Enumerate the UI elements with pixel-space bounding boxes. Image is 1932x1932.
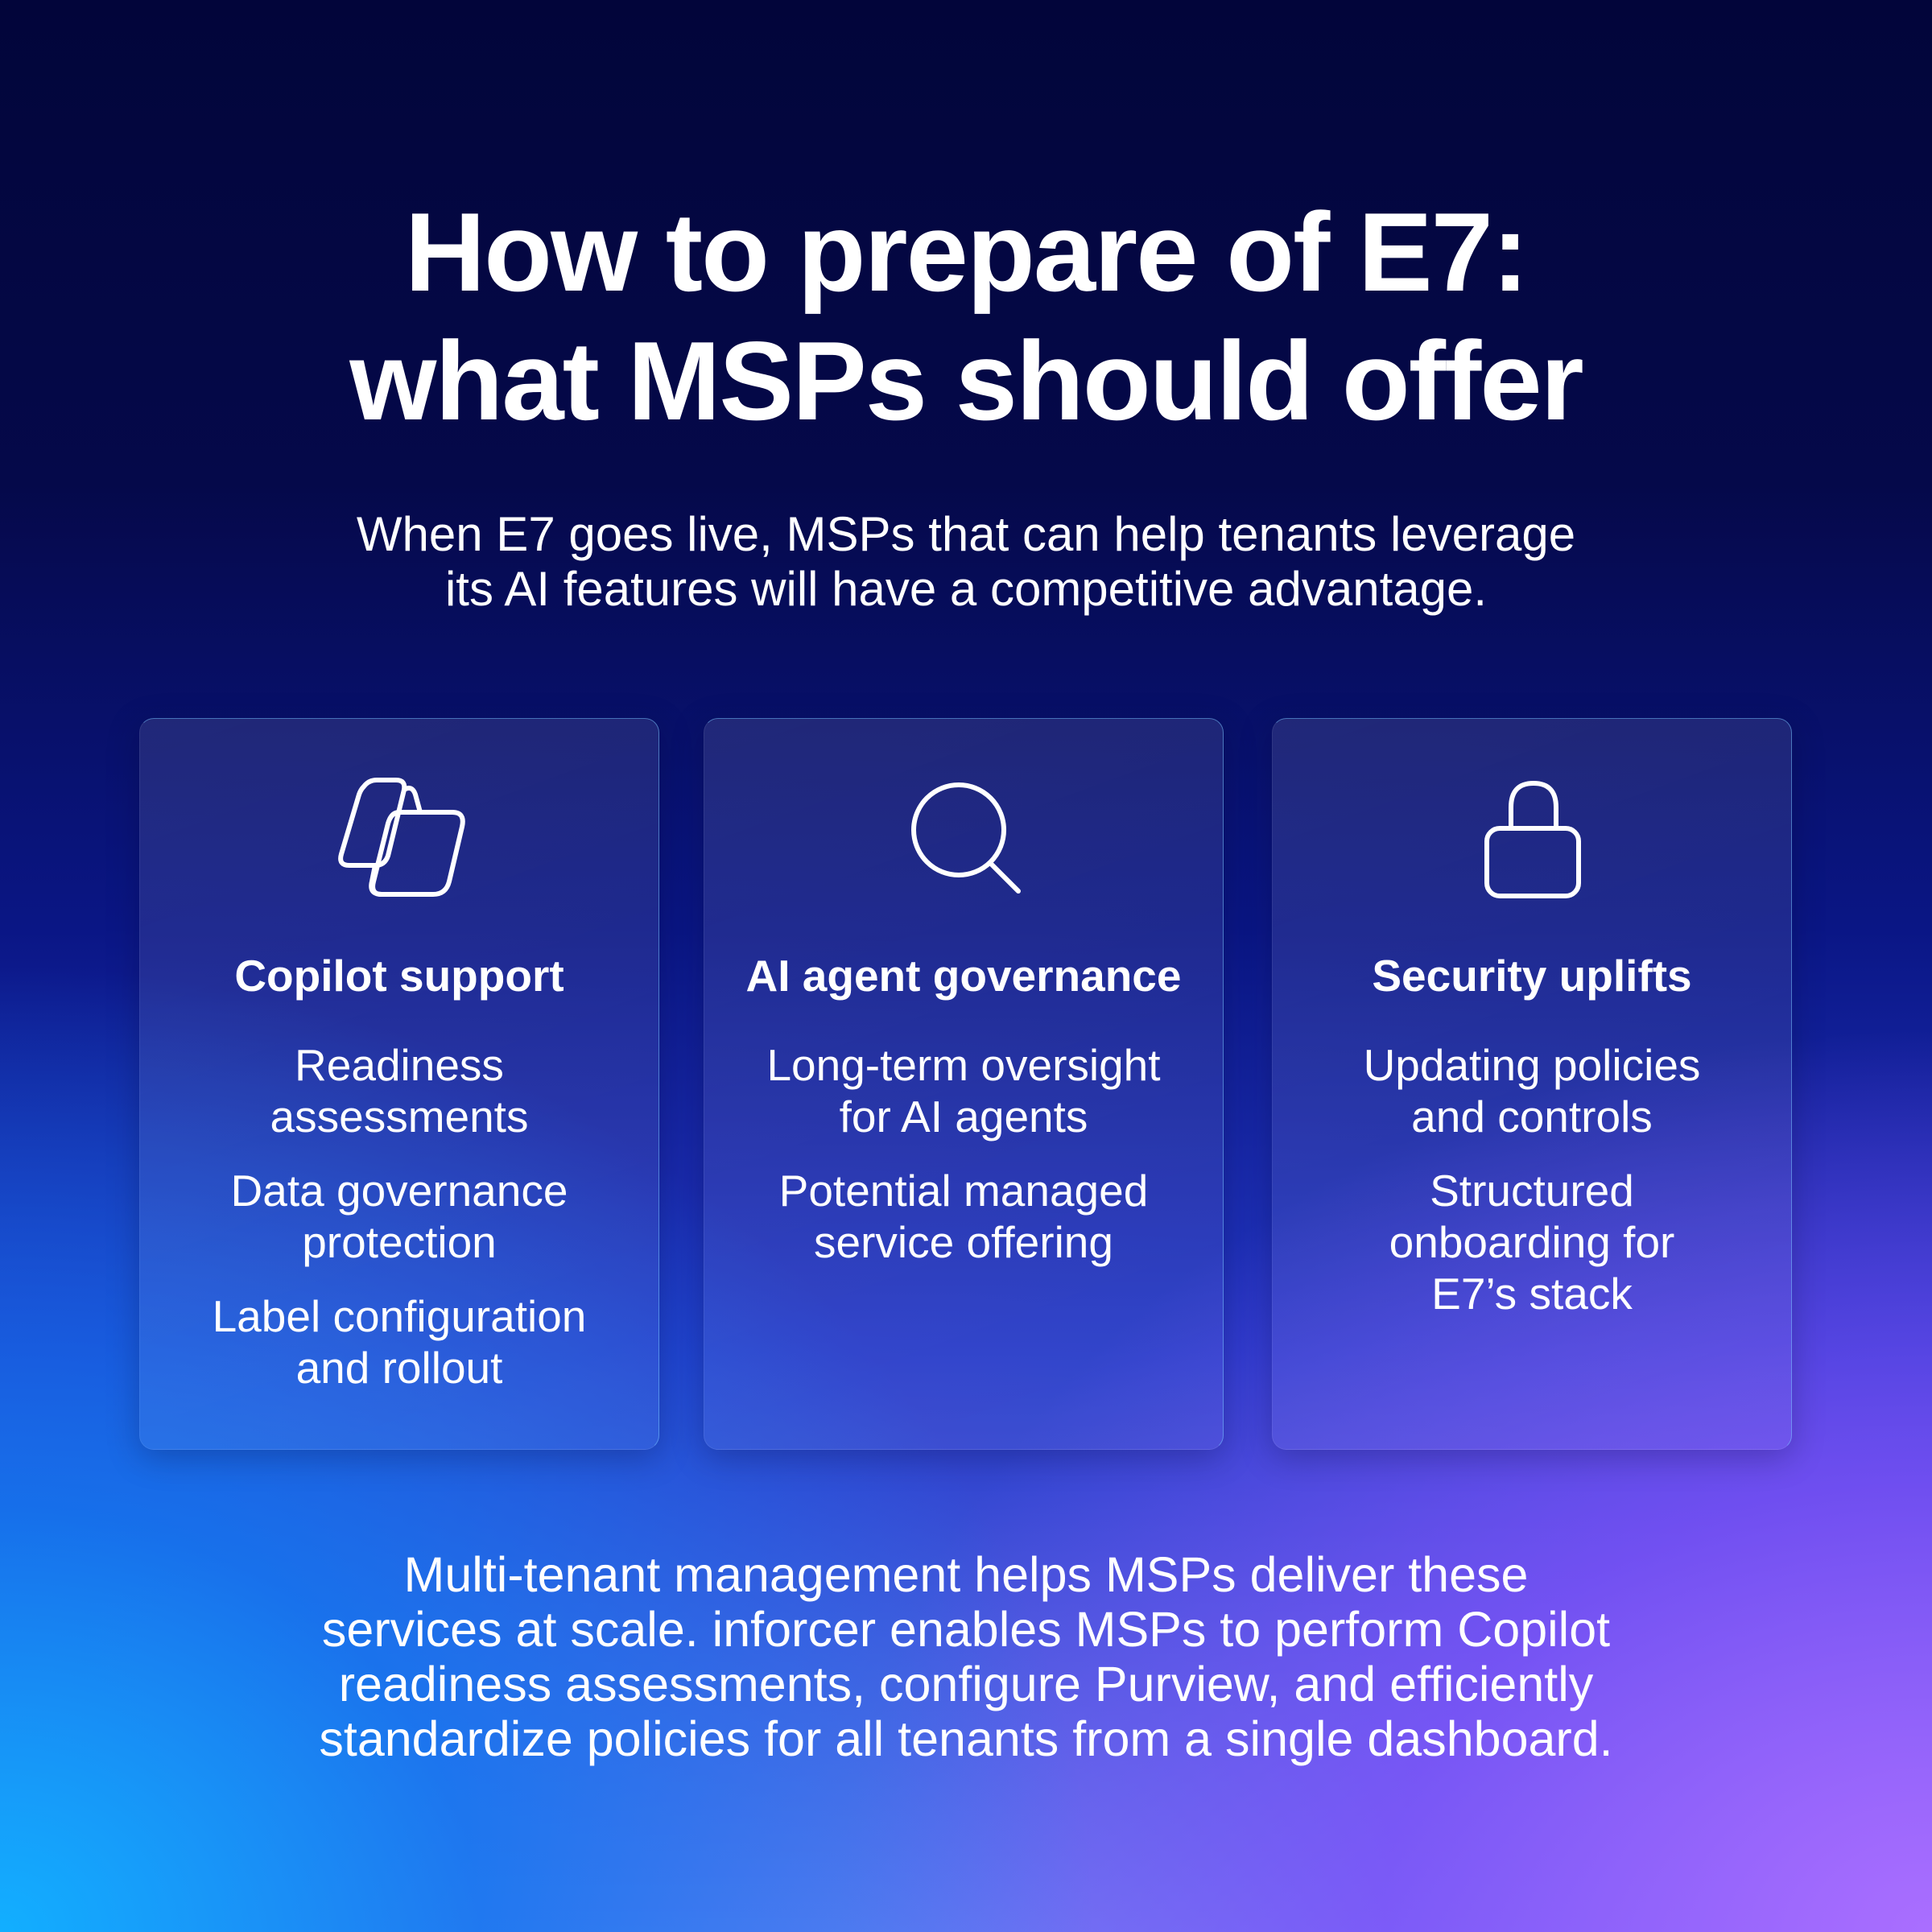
text block <box>213 1040 586 1393</box>
text block: service offering <box>814 1217 1113 1267</box>
icon: magnifier <box>911 782 1021 894</box>
title: How to prepare of E7: <box>405 190 1527 315</box>
text block: protection <box>302 1217 497 1267</box>
panel: security uplifts <box>1272 718 1792 1450</box>
title: what MSPs should offer <box>349 319 1583 444</box>
icon: copilot <box>338 778 465 897</box>
text block: Long-term oversight <box>766 1040 1161 1090</box>
panel: AI agent governance <box>704 718 1224 1450</box>
footer text <box>319 1547 1613 1766</box>
footer text: readiness assessments, configure Purview, and efficiently <box>339 1657 1593 1711</box>
subtitle <box>357 507 1575 616</box>
footer text: services at scale. inforcer enables MSPs to perform Copilot <box>322 1602 1610 1657</box>
icon: lock <box>1484 781 1581 898</box>
text block: and controls <box>1411 1092 1653 1141</box>
subtitle: its AI features will have a competitive advantage. <box>445 562 1487 616</box>
text block: for AI agents <box>840 1092 1088 1141</box>
text block: Updating policies <box>1364 1040 1700 1090</box>
text block: assessments <box>270 1092 528 1141</box>
footer text: standardize policies for all tenants from a single dashboard. <box>319 1711 1613 1766</box>
panel: copilot support <box>139 718 659 1450</box>
text block: Readiness <box>295 1040 504 1090</box>
subtitle: When E7 goes live, MSPs that can help tenants leverage <box>357 507 1575 561</box>
heading: Copilot support <box>234 951 564 1001</box>
text block: Data governance <box>231 1166 568 1216</box>
text block: E7’s stack <box>1431 1269 1633 1319</box>
text block: Label configuration <box>213 1291 586 1341</box>
text block: Structured <box>1430 1166 1634 1216</box>
text block: Potential managed <box>779 1166 1148 1216</box>
text block: and rollout <box>296 1343 502 1393</box>
footer text: Multi-tenant management helps MSPs deliver these <box>404 1547 1528 1602</box>
heading: Security uplifts <box>1372 951 1692 1001</box>
heading: AI agent governance <box>745 951 1181 1001</box>
text block <box>1364 1040 1700 1319</box>
text block <box>766 1040 1161 1267</box>
text block: onboarding for <box>1389 1217 1674 1267</box>
title <box>349 190 1583 444</box>
